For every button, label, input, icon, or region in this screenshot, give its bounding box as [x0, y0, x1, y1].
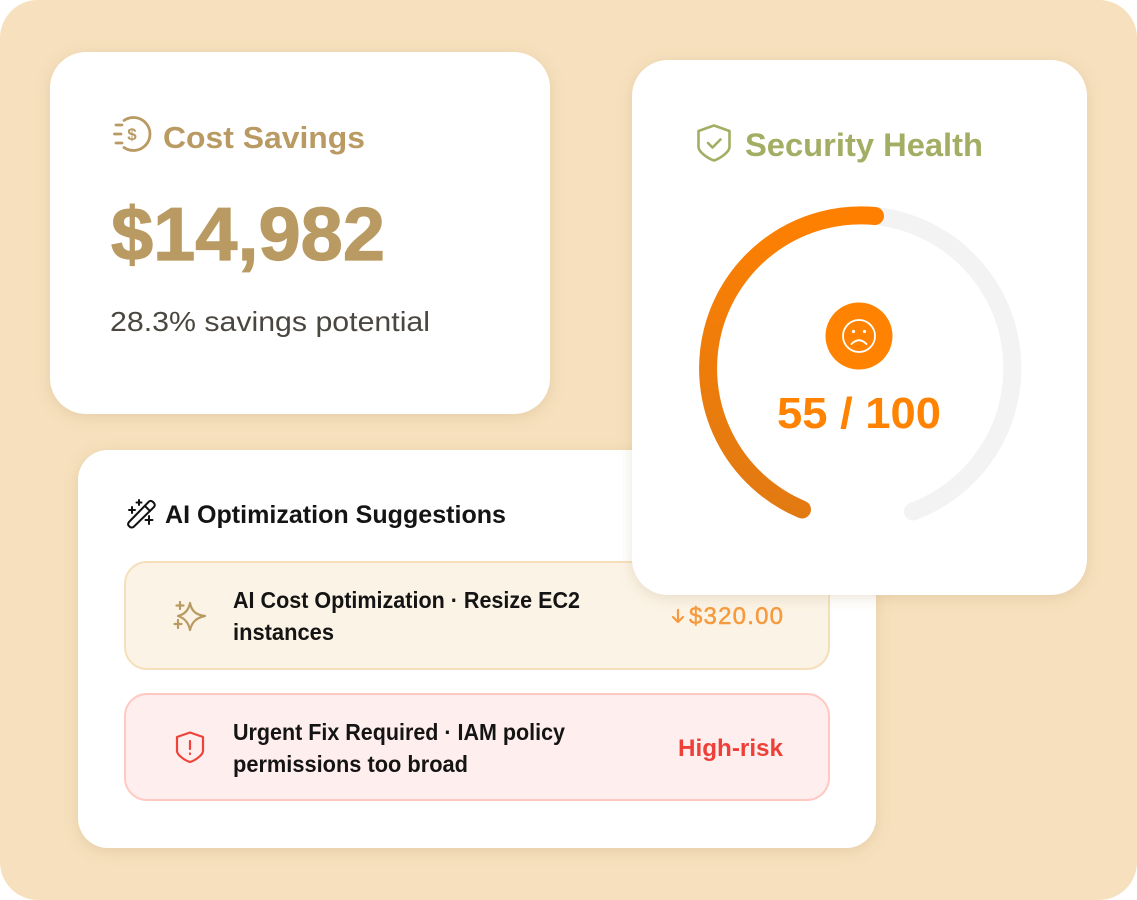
icon: sad face — [826, 302, 892, 370]
text: cost optimization: instances — [233, 619, 334, 645]
panel: cost savings — [50, 52, 550, 414]
icon: magic wand — [128, 500, 155, 528]
gauge chart — [708, 215, 1012, 512]
value: security score: 55 / 100 — [777, 389, 941, 438]
heading: AI optimization suggestions: AI Optimization Suggestions — [165, 501, 506, 529]
card: urgent fix — [125, 694, 829, 800]
heading: security health: Security Health — [745, 127, 983, 163]
text: urgent fix: permissions too broad — [233, 751, 468, 777]
panel: security health — [632, 60, 1087, 595]
icon: shield check — [698, 126, 730, 160]
icon: dollar coin — [114, 118, 150, 150]
value: savings amount: $14,982 — [111, 192, 385, 276]
panel: AI optimization suggestions — [78, 450, 876, 848]
icon: dollar coin: $ — [127, 125, 137, 144]
label: high risk: High-risk — [678, 735, 784, 762]
value: saving amount: $320.00 — [689, 603, 783, 630]
icon: sparkles — [174, 602, 205, 630]
text: urgent fix: Urgent Fix Required · IAM policy — [233, 719, 565, 745]
heading: cost savings: Cost Savings — [163, 120, 365, 155]
icon: warning shield — [177, 732, 203, 762]
text: savings potential: 28.3% savings potential — [110, 306, 430, 337]
card: cost optimization — [125, 562, 829, 669]
text: cost optimization: AI Cost Optimization · Resize EC2 — [233, 587, 580, 613]
